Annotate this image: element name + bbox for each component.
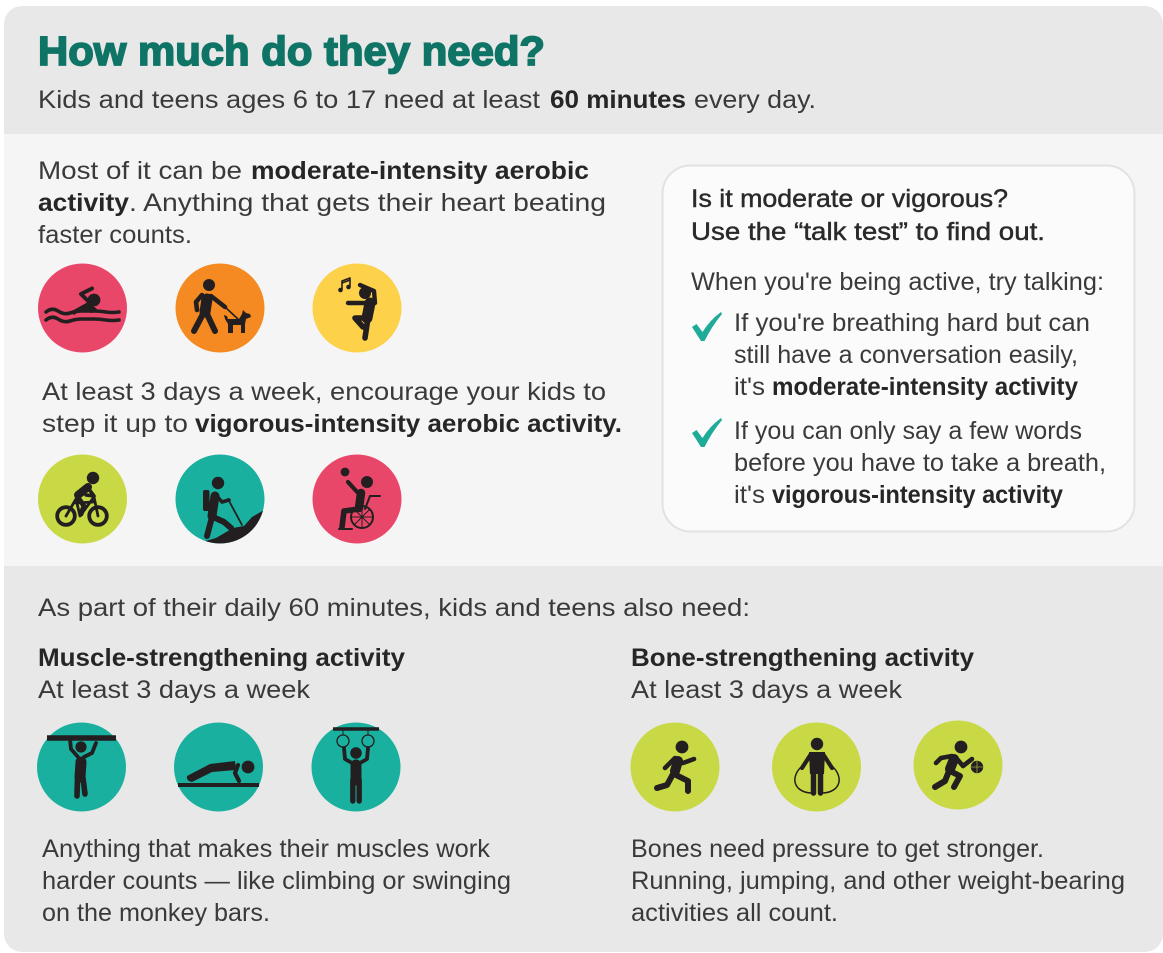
icon: dancing bbox=[312, 264, 402, 352]
subtitle bbox=[38, 86, 816, 114]
heading: bone-strengthening bbox=[631, 644, 974, 704]
moderate text: still have a conversation easily, bbox=[734, 341, 1078, 369]
text block: moderate-intensity intro: moderate-intensity aerobic bbox=[251, 157, 589, 185]
vigorous text: before you have to take a breath, bbox=[734, 449, 1106, 477]
vigorous text: If you can only say a few words bbox=[734, 417, 1082, 445]
heading: muscle-strengthening bbox=[38, 644, 405, 704]
vigorous text: it's bbox=[734, 481, 765, 509]
moderate text: If you're breathing hard but can bbox=[734, 309, 1090, 337]
text block: muscle description: harder counts — like climbing or swinging bbox=[42, 867, 511, 895]
text block: moderate-intensity intro: faster counts. bbox=[38, 221, 192, 249]
icon: hanging from a bar bbox=[37, 722, 126, 812]
text block: muscle description: Anything that makes their muscles work bbox=[42, 835, 490, 863]
panel: talk test callout bbox=[662, 166, 1134, 532]
text block: bone description: activities all count. bbox=[631, 899, 838, 927]
text block: vigorous-intensity intro bbox=[42, 378, 622, 438]
icon: wheelchair basketball bbox=[312, 454, 402, 544]
text block: bone description bbox=[631, 835, 1125, 927]
text block: daily 60 minutes lead-in: As part of their daily 60 minutes, kids and teens also need: bbox=[38, 594, 750, 622]
subtitle: Kids and teens ages 6 to 17 need at least bbox=[38, 86, 540, 114]
icon: push-up bbox=[174, 722, 263, 812]
text block: bone description: Running, jumping, and other weight-bearing bbox=[631, 867, 1125, 895]
heading: bone-strengthening: At least 3 days a week bbox=[631, 676, 903, 704]
icon: check mark 2 bbox=[692, 418, 722, 447]
text block: muscle description: on the monkey bars. bbox=[42, 899, 270, 927]
heading: muscle-strengthening: Muscle-strengthening activity bbox=[38, 644, 405, 672]
moderate text bbox=[734, 309, 1090, 401]
heading: muscle-strengthening: At least 3 days a week bbox=[38, 676, 311, 704]
text block: moderate-intensity intro: activity bbox=[38, 189, 129, 217]
callout heading: Use the “talk test” to find out. bbox=[691, 218, 1045, 246]
text block: vigorous-intensity intro: At least 3 days a week, encourage your kids to bbox=[42, 378, 606, 406]
text block: vigorous-intensity intro: step it up to bbox=[42, 410, 188, 438]
icon: jump rope bbox=[772, 722, 861, 812]
text block: bone description: Bones need pressure to get stronger. bbox=[631, 835, 1044, 863]
text block: vigorous-intensity intro: vigorous-intensity aerobic activity. bbox=[195, 410, 622, 438]
moderate text: moderate-intensity activity bbox=[772, 373, 1078, 401]
subtitle: every day. bbox=[694, 86, 816, 114]
callout heading: Is it moderate or vigorous? bbox=[691, 185, 1008, 213]
vigorous text bbox=[734, 417, 1106, 509]
text block: moderate-intensity intro bbox=[38, 157, 606, 249]
moderate text: it's bbox=[734, 373, 765, 401]
icon: gymnastic rings bbox=[312, 722, 400, 812]
title: How much do they need? bbox=[38, 28, 545, 74]
subtitle: 60 minutes bbox=[550, 86, 686, 114]
icon: check mark 1 bbox=[692, 312, 722, 341]
text block: moderate-intensity intro: . Anything that gets their heart beating bbox=[129, 189, 606, 217]
vigorous text: vigorous-intensity activity bbox=[772, 481, 1063, 509]
panel: header bbox=[38, 28, 816, 114]
text block: muscle description bbox=[42, 835, 511, 927]
text block: moderate-intensity intro: Most of it can be bbox=[38, 157, 242, 185]
icon: walking the dog bbox=[176, 264, 264, 352]
callout intro: When you're being active, try talking: bbox=[691, 268, 1104, 296]
icon: running bbox=[630, 722, 720, 812]
heading: bone-strengthening: Bone-strengthening activity bbox=[631, 644, 974, 672]
icon: cycling bbox=[38, 454, 127, 544]
callout heading bbox=[691, 185, 1045, 246]
icon: swimming bbox=[38, 264, 127, 352]
icon: dribbling a basketball bbox=[914, 720, 1002, 810]
icon: hiking bbox=[176, 454, 264, 548]
